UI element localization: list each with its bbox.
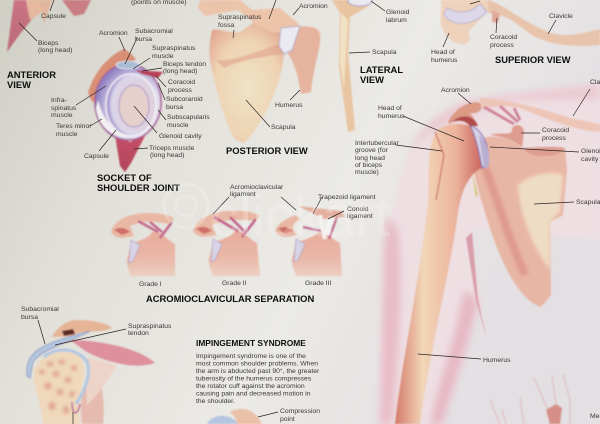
heading: impingement syndrome: IMPINGEMENT SYNDROME — [196, 338, 306, 348]
callouts: posterior view labels: Scapula — [271, 124, 296, 131]
illustration: socket of shoulder joint — [88, 49, 163, 172]
callouts: posterior view labels: Humerus — [275, 102, 303, 109]
label: biceps long head: (long head) — [38, 47, 72, 54]
callouts: socket of shoulder joint labels: Subscapularis — [167, 114, 210, 121]
callout: compression point: point — [280, 416, 295, 423]
grade labels: Grade III — [305, 280, 332, 287]
text block: impingement description: Impingement syndrome is one of the — [196, 353, 306, 360]
callouts: superior view labels: process — [490, 42, 514, 49]
illustration: large scapula — [474, 137, 567, 307]
callouts: impingement labels: Supraspinatus — [128, 323, 172, 330]
callouts: socket of shoulder joint labels: Capsule — [84, 153, 109, 160]
callouts: large shoulder labels: Head of — [378, 105, 402, 112]
callouts: posterior view labels: Supraspinatus — [218, 14, 262, 21]
callouts: socket of shoulder joint labels: Teres minor — [56, 123, 92, 130]
callouts: socket of shoulder joint labels: muscle — [152, 53, 174, 60]
illustration: acromioclavicular grade III — [275, 206, 345, 276]
callouts: lateral view labels: Glenoid — [386, 9, 410, 16]
illustration: shoulder and arm silhouette — [378, 84, 600, 424]
callouts: large shoulder labels: humerus — [378, 113, 405, 120]
callouts: socket of shoulder joint labels: Subcoraroid — [166, 96, 203, 103]
callouts: socket of shoulder joint labels: Coracoid — [168, 79, 195, 86]
heading: lateral view: LATERAL — [360, 64, 403, 75]
callouts: socket of shoulder joint labels: Glenoid cavity — [159, 133, 202, 140]
label: biceps long head — [19, 23, 72, 54]
heading: lateral view — [360, 64, 403, 85]
callouts: acromioclavicular labels: Trapezoid ligament — [318, 194, 376, 201]
heading: lateral view: VIEW — [360, 74, 384, 85]
heading: anterior view — [7, 69, 56, 90]
heading: acromioclavicular separation: ACROMIOCLAVICULAR SEPARATION — [146, 293, 314, 304]
callouts: socket of shoulder joint labels: Biceps tendon — [163, 61, 206, 68]
illustration: elbow fragment bottom right — [490, 374, 570, 424]
illustration: large humerus — [395, 124, 489, 424]
callout: compression point: Compression — [280, 408, 320, 415]
callouts: socket of shoulder joint labels: Supraspinatus — [152, 45, 196, 52]
text block: impingement description: tuberosity of the humerus compresses — [196, 376, 312, 382]
callout: compression point — [258, 408, 320, 423]
text block: impingement description: the rotator cuff against the acromion — [196, 383, 305, 390]
callouts: large shoulder labels: of biceps — [355, 162, 383, 169]
heading: anterior view: ANTERIOR — [7, 69, 56, 80]
callouts: lateral view labels: labrum — [386, 17, 407, 24]
text block: impingement description — [196, 353, 320, 405]
callouts: socket of shoulder joint labels: Subacromial — [135, 28, 173, 35]
callouts: socket of shoulder joint labels: (long head) — [163, 68, 197, 75]
callouts: socket of shoulder joint labels: Infra- — [51, 97, 67, 104]
grade labels: Grade I — [139, 281, 162, 288]
illustration: superior view — [441, 0, 600, 46]
callouts: superior view labels — [431, 1, 573, 64]
heading: superior view: SUPERIOR VIEW — [495, 54, 571, 65]
callouts: socket of shoulder joint labels: bursa — [135, 36, 152, 43]
illustration: posterior view scapula and humerus — [198, 0, 320, 143]
callouts: large shoulder labels: Intertubercular — [355, 140, 400, 147]
callouts: large shoulder labels: cavity — [581, 156, 599, 163]
label: capsule top: Capsule — [41, 13, 66, 20]
text block: impingement description: the shoulder. — [196, 398, 235, 405]
illustration: lateral view scapula — [332, 0, 372, 132]
callouts: lateral view labels — [349, 1, 410, 56]
callouts: socket of shoulder joint labels: muscle — [56, 131, 78, 138]
heading: socket of shoulder joint: SOCKET OF — [97, 172, 152, 183]
callouts: large shoulder labels: Scapula — [576, 199, 600, 206]
grade labels — [139, 280, 332, 288]
callouts: large shoulder labels: muscle) — [355, 169, 379, 176]
illustration: impingement cross-section — [27, 320, 155, 424]
callouts: large shoulder labels: groove (for — [355, 147, 389, 154]
callouts: superior view labels: Head of — [431, 49, 455, 56]
callouts: impingement labels: Subacromial — [21, 306, 59, 313]
callouts: superior view labels: Coracoid — [490, 34, 517, 41]
callouts: large shoulder labels: process — [542, 135, 566, 142]
callouts: impingement labels — [21, 306, 172, 424]
illustration: anterior view muscles (top left) — [7, 0, 91, 52]
callouts: socket of shoulder joint labels — [51, 28, 210, 160]
heading: anterior view: VIEW — [7, 79, 31, 90]
callouts: posterior view labels: Acromion — [299, 3, 328, 10]
grade labels: Grade II — [222, 280, 247, 287]
callouts: large shoulder labels: long head — [355, 155, 385, 162]
callouts: impingement labels: tendon — [128, 330, 149, 337]
heading: socket of shoulder joint — [97, 172, 180, 193]
callouts: large shoulder labels — [355, 79, 600, 364]
callouts: superior view labels: humerus — [431, 57, 458, 64]
callouts: large shoulder labels: Acromion — [441, 87, 470, 94]
callouts: acromioclavicular labels: ligament — [347, 213, 373, 220]
illustration: large clavicle, acromion and ligaments — [448, 98, 600, 198]
callouts: socket of shoulder joint labels: (long head) — [150, 152, 184, 159]
callouts: large shoulder labels: Coracoid — [542, 127, 569, 134]
text block: impingement description: most common shoulder problems. When — [196, 360, 318, 368]
callouts: impingement labels: bursa — [21, 314, 38, 321]
label: capsule top — [41, 0, 66, 20]
label: biceps long head: Biceps — [38, 40, 59, 47]
callouts: large shoulder labels: Humerus — [483, 357, 511, 364]
heading: posterior view: POSTERIOR VIEW — [226, 145, 308, 156]
callouts: lateral view labels: Scapula — [372, 49, 397, 56]
callouts: socket of shoulder joint labels: Triceps muscle — [149, 145, 195, 152]
callouts: acromioclavicular labels: ligament — [230, 191, 256, 198]
callouts: acromioclavicular labels — [213, 184, 376, 220]
text block: impingement description: causing pain and decreased motion in — [196, 390, 311, 398]
callouts: socket of shoulder joint labels: spinatus — [51, 105, 77, 112]
callouts: acromioclavicular labels: Acromioclavicular — [230, 184, 284, 191]
text block: impingement description: the arm is abducted past 90°, the greater — [196, 367, 320, 375]
callouts: acromioclavicular labels: Conoid — [347, 206, 369, 213]
callouts: posterior view labels — [218, 0, 328, 131]
illustration: acromioclavicular grade I — [111, 213, 175, 276]
callouts: posterior view labels: fossa — [218, 22, 234, 29]
callouts: socket of shoulder joint labels: muscle — [51, 112, 73, 119]
watermark: clickart — [210, 184, 390, 249]
callouts: superior view labels: Clavicle — [549, 13, 573, 20]
illustration: acromioclavicular grade II — [193, 211, 260, 276]
callouts: socket of shoulder joint labels: bursa — [166, 104, 183, 111]
callouts: socket of shoulder joint labels: muscle — [167, 122, 189, 129]
callouts: socket of shoulder joint labels: Acromion — [99, 30, 128, 37]
illustration: compression point — [207, 409, 262, 424]
callouts: socket of shoulder joint labels: process — [168, 87, 192, 94]
heading: socket of shoulder joint: SHOULDER JOINT — [97, 182, 180, 193]
